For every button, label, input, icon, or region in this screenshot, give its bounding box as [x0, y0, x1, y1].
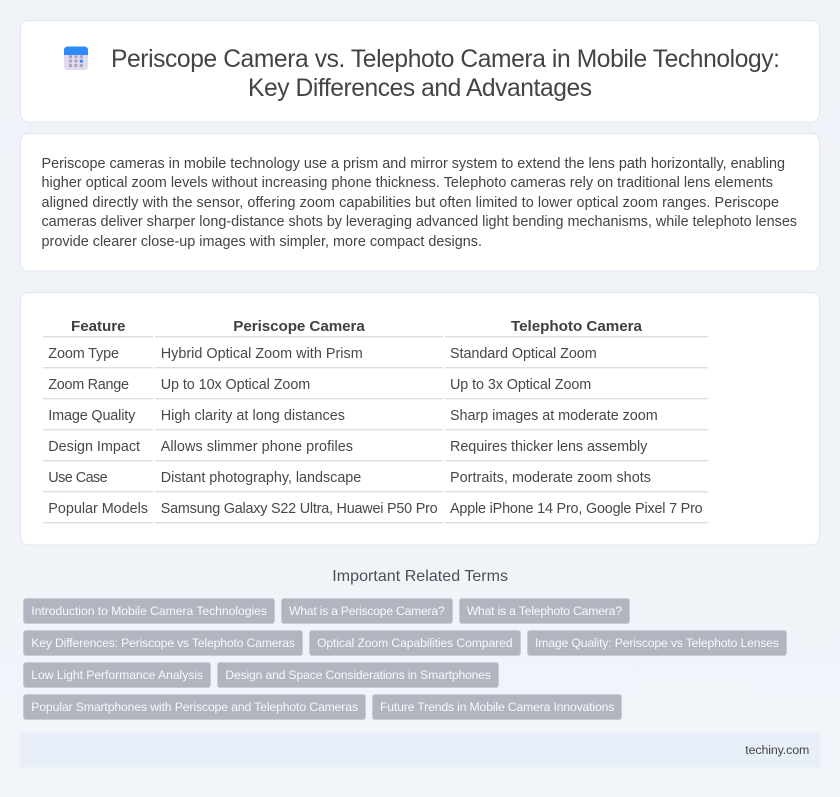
row: zoom type: Hybrid Optical Zoom with Prism — [161, 346, 363, 362]
tag: Optical Zoom Capabilities Compared — [317, 636, 512, 650]
tag — [282, 598, 452, 624]
text block: description: Periscope cameras in mobile technology use a prism and mirror system to extend the lens path horizontally, enabling — [42, 156, 785, 172]
row: zoom type: Zoom Type — [48, 346, 119, 362]
row: zoom range: Zoom Range — [48, 377, 129, 393]
row: design impact — [48, 439, 648, 455]
tag: What is a Telephoto Camera? — [467, 604, 622, 618]
row: use case: Distant photography, landscape — [161, 470, 361, 486]
icon: calendar — [64, 46, 88, 70]
related term tags — [24, 598, 786, 720]
row: zoom type — [48, 346, 597, 362]
tag — [218, 662, 498, 688]
row: use case: Portraits, moderate zoom shots — [450, 470, 651, 486]
tag — [24, 598, 274, 624]
text block: description — [42, 156, 797, 250]
tag — [24, 662, 210, 688]
title — [111, 46, 780, 102]
heading: important related terms: Important Related Terms — [332, 568, 508, 585]
panel: intro paragraph — [20, 134, 820, 271]
tag — [310, 630, 520, 656]
row: use case — [48, 470, 651, 486]
tag — [460, 598, 630, 624]
tag — [24, 630, 302, 656]
tag — [24, 694, 366, 720]
table row lines — [43, 336, 708, 523]
text block: description: cameras deliver sharper long-distance shots by leveraging advanced light bending mechanisms, while telephoto lenses — [42, 214, 797, 230]
tag: Future Trends in Mobile Camera Innovations — [380, 700, 614, 714]
tag — [528, 630, 786, 656]
tag: Low Light Performance Analysis — [31, 668, 203, 682]
title: Periscope Camera vs. Telephoto Camera in Mobile Technology: — [111, 46, 780, 73]
row: popular models: Samsung Galaxy S22 Ultra, Huawei P50 Pro — [161, 501, 438, 517]
row: design impact: Design Impact — [48, 439, 140, 455]
tag — [372, 694, 622, 720]
table header — [71, 318, 643, 335]
tag: Image Quality: Periscope vs Telephoto Lenses — [535, 636, 779, 650]
row: zoom range: Up to 3x Optical Zoom — [450, 377, 591, 393]
tag: Popular Smartphones with Periscope and Telephoto Cameras — [31, 700, 358, 714]
row: popular models: Popular Models — [48, 501, 148, 517]
row: use case: Use Case — [48, 470, 108, 486]
row: zoom range — [48, 377, 591, 393]
table header: Feature — [71, 318, 126, 335]
text block: description: provide clearer close-up images with simpler, more compact designs. — [42, 234, 482, 250]
row: design impact: Allows slimmer phone profiles — [161, 439, 353, 455]
text block: description: higher optical zoom levels without increasing phone thickness. Telephoto cameras rely on traditional lens elements — [42, 175, 773, 191]
table header: Periscope Camera — [233, 318, 365, 335]
panel: comparison table — [20, 292, 820, 545]
tag: Design and Space Considerations in Smartphones — [225, 668, 491, 682]
row: image quality: High clarity at long distances — [161, 408, 345, 424]
row: image quality — [48, 408, 658, 424]
tag: Introduction to Mobile Camera Technologies — [31, 604, 267, 618]
row: popular models: Apple iPhone 14 Pro, Google Pixel 7 Pro — [450, 501, 703, 517]
row: image quality: Sharp images at moderate zoom — [450, 408, 658, 424]
table header: Telephoto Camera — [511, 318, 643, 335]
header panel — [20, 20, 820, 122]
row: popular models — [48, 501, 703, 517]
footer — [20, 733, 820, 767]
tag: Key Differences: Periscope vs Telephoto Cameras — [31, 636, 295, 650]
title: Key Differences and Advantages — [248, 75, 592, 102]
footer brand: techiny.com — [745, 743, 809, 757]
row: image quality: Image Quality — [48, 408, 136, 424]
row: design impact: Requires thicker lens assembly — [450, 439, 648, 455]
row: zoom range: Up to 10x Optical Zoom — [161, 377, 310, 393]
tag: What is a Periscope Camera? — [289, 604, 445, 618]
text block: description: aligned directly with the sensor, offering zoom capabilities but often limited to lower optical zoom ranges. Periscope — [42, 195, 779, 211]
row: zoom type: Standard Optical Zoom — [450, 346, 597, 362]
